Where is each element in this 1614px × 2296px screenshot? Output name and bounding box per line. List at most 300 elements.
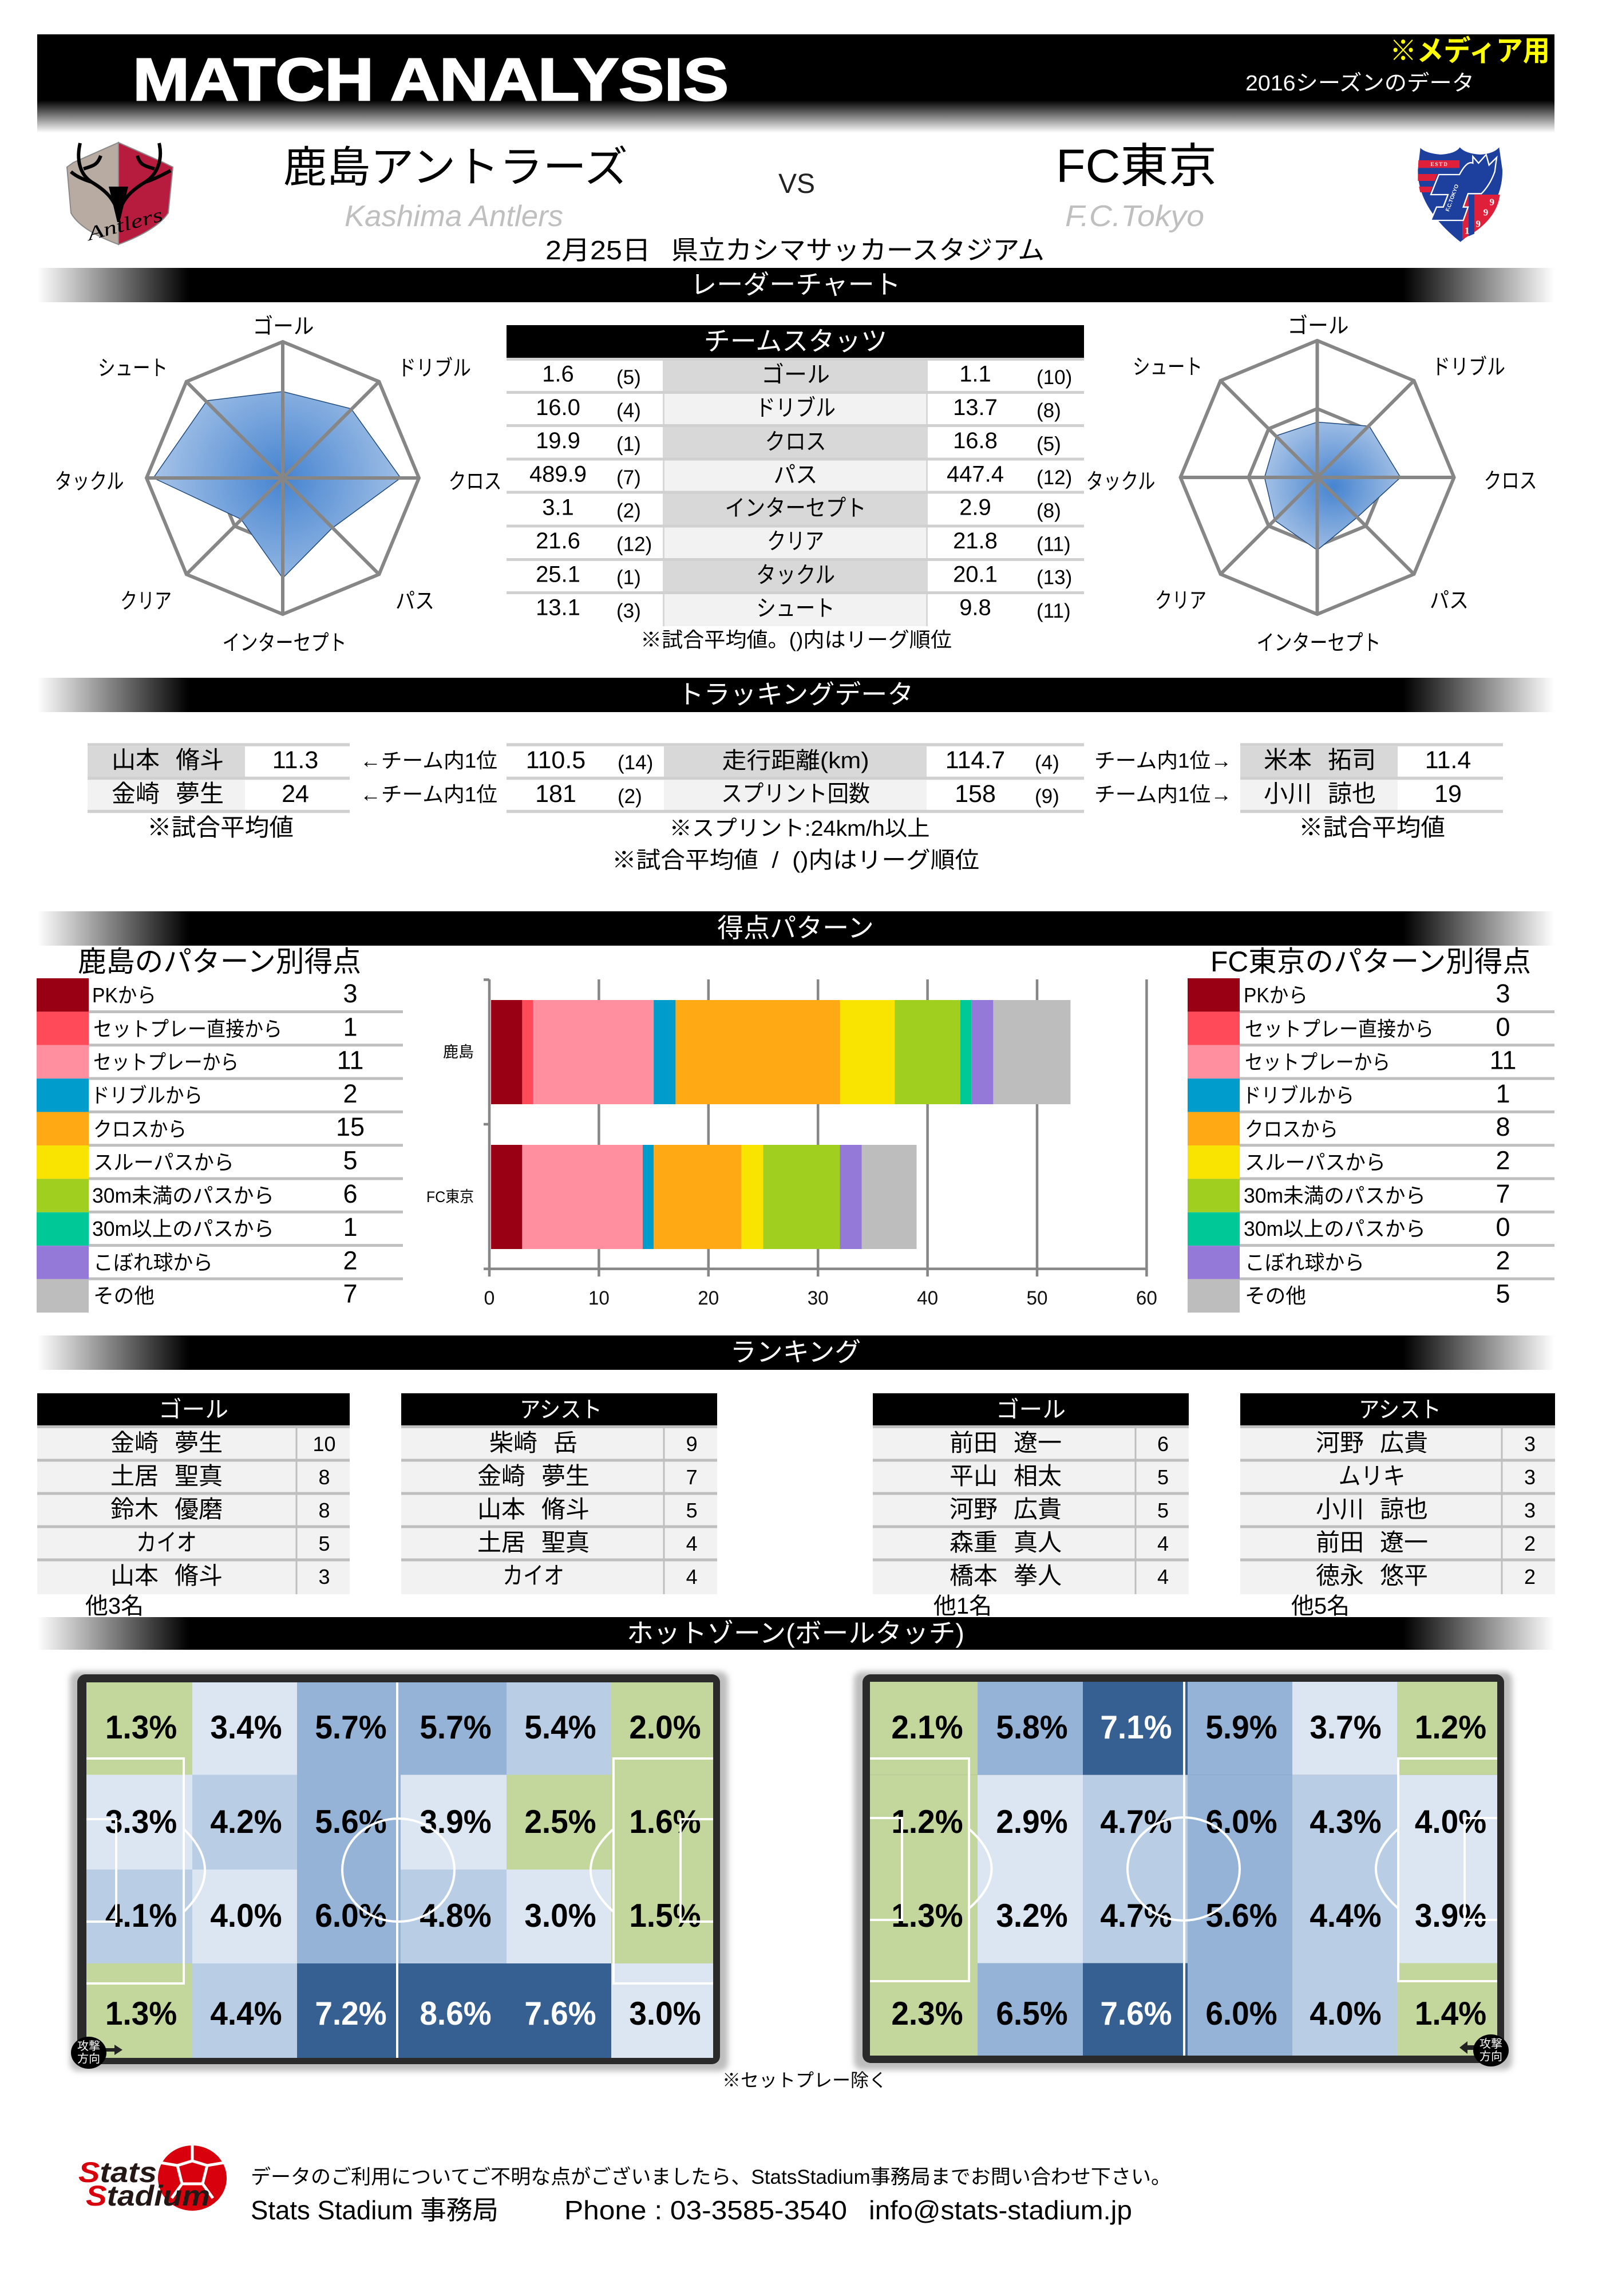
- icon: FC Tokyo crest: 9: [1475, 219, 1481, 230]
- icon: attack direction right: 攻撃: [77, 2040, 100, 2053]
- icon: FC Tokyo crest: F.C.TOKYO: [1445, 184, 1459, 212]
- pattern labels and counts: 11: [337, 1046, 363, 1075]
- panel: tracking team comparison: [507, 745, 1084, 873]
- axis labels: パス: [1430, 589, 1469, 613]
- axis labels: クリア: [120, 590, 172, 614]
- ranking table: Kashima goals: ゴール: [159, 1397, 228, 1422]
- section heading: tracking data: トラッキングデータ: [678, 679, 913, 709]
- axis labels: タックル: [1086, 470, 1155, 494]
- pattern labels and counts: 2: [343, 1246, 358, 1275]
- ranking table: Kashima assists: 5: [686, 1499, 698, 1522]
- axis labels: シュート: [1133, 355, 1202, 380]
- icon: Stats Stadium logo: [78, 2145, 227, 2212]
- ranking table: FC Tokyo goals: ゴール: [996, 1397, 1066, 1422]
- section heading: ranking: ランキング: [730, 1337, 861, 1367]
- axis labels: パス: [395, 590, 434, 614]
- ranking table: FC Tokyo goals: 4: [1157, 1565, 1169, 1588]
- pitch markings: [86, 1682, 713, 2058]
- pattern labels and counts: [1243, 979, 1516, 1309]
- pattern labels and counts: 1: [1496, 1079, 1510, 1108]
- ranking table: Kashima assists: 土居 聖真: [477, 1529, 590, 1556]
- stat values: Kashima: 1.6: [542, 362, 574, 387]
- panel: tracking team comparison: 114.7: [946, 746, 1005, 774]
- pattern labels and counts: 15: [336, 1112, 365, 1141]
- panel: tracking right leaders: 11.4: [1425, 746, 1471, 774]
- phone: Phone : 03-3585-3540: [564, 2195, 847, 2225]
- percentages: 1.5%: [629, 1897, 701, 1934]
- ranking notes: 他5名: [1291, 1594, 1350, 1619]
- stat values: FC Tokyo: (8): [1037, 500, 1061, 522]
- note: averages: ※試合平均値 / ()内はリーグ順位: [612, 848, 979, 873]
- ranking table: Kashima assists: [401, 1393, 717, 1594]
- icon: attack direction left: [1459, 2034, 1509, 2066]
- pattern labels and counts: 2: [1496, 1146, 1510, 1175]
- icon: Kashima Antlers crest: [67, 143, 173, 245]
- season note: 2016シーズンのデータ: [1245, 72, 1474, 96]
- match date and venue: 県立カシマサッカースタジアム: [671, 235, 1045, 265]
- percentages: 4.0%: [1310, 1995, 1382, 2032]
- section heading: hot zone: [37, 1617, 1554, 1650]
- stat values: FC Tokyo: (8): [1037, 400, 1061, 422]
- panel: tracking left leaders: 金崎 夢生: [112, 780, 224, 807]
- section heading: hot zone: ホットゾーン(ボールタッチ): [627, 1618, 964, 1648]
- footnote: ※試合平均値。()内はリーグ順位: [640, 628, 952, 651]
- pitch markings: [870, 1682, 1497, 2056]
- percentages: 1.3%: [105, 1709, 177, 1745]
- ranking table: FC Tokyo assists: ムリキ: [1338, 1463, 1406, 1489]
- versus: VS: [778, 169, 815, 199]
- percentages: 1.3%: [105, 1995, 177, 2032]
- axis labels: [55, 315, 501, 655]
- pattern labels and counts: 30m未満のパスから: [1244, 1184, 1426, 1207]
- axis labels: ゴール: [1288, 314, 1348, 338]
- stat names: シュート: [757, 596, 834, 621]
- stat values: FC Tokyo: 20.1: [953, 562, 998, 587]
- ranking table: Kashima goals: 8: [318, 1499, 330, 1522]
- stat names: インターセプト: [725, 496, 867, 521]
- ranking table: Kashima goals: 5: [318, 1532, 330, 1555]
- percentages: 4.1%: [105, 1897, 177, 1934]
- panel: tracking left leaders: 24: [282, 780, 309, 808]
- ranking table: FC Tokyo assists: 3: [1524, 1499, 1536, 1522]
- ranking notes: 他1名: [933, 1594, 992, 1619]
- percentages: 1.3%: [891, 1897, 963, 1934]
- stat values: Kashima: 19.9: [536, 428, 580, 453]
- ranking notes: 他3名: [85, 1594, 144, 1619]
- percentages: 2.5%: [524, 1803, 596, 1840]
- percentages: 2.9%: [996, 1803, 1068, 1840]
- ranking table: Kashima assists: 7: [686, 1465, 698, 1489]
- ranking table: Kashima goals: 鈴木 優磨: [110, 1496, 223, 1523]
- heat cells: [870, 1682, 1497, 2056]
- arrows: team best Kashima: [360, 749, 497, 806]
- ranking table: FC Tokyo goals: 森重 真人: [950, 1529, 1062, 1556]
- percentages: 5.6%: [315, 1803, 387, 1840]
- pattern labels and counts: セットプレー直接から: [93, 1017, 282, 1041]
- pattern labels and counts: PKから: [1244, 983, 1308, 1007]
- ranking table: Kashima goals: 山本 脩斗: [110, 1562, 223, 1589]
- panel: hot zone FC Tokyo: [854, 1671, 1512, 2070]
- section heading: scoring patterns: 得点パターン: [717, 913, 874, 943]
- icon: attack direction right: 方向: [77, 2052, 100, 2065]
- pattern labels and counts: 2: [343, 1079, 358, 1108]
- percentages: 3.9%: [1415, 1897, 1486, 1934]
- stat names: クロス: [765, 429, 826, 455]
- stat values: FC Tokyo: (11): [1037, 600, 1071, 622]
- percentages: 4.0%: [1415, 1803, 1486, 1840]
- pattern labels and counts: PKから: [92, 983, 156, 1007]
- media note: ※メディア用: [1390, 35, 1550, 67]
- ranking table: FC Tokyo goals: 橋本 拳人: [950, 1562, 1062, 1589]
- stat values: Kashima: 13.1: [536, 595, 580, 621]
- pattern labels and counts: 6: [343, 1179, 358, 1208]
- note: ※試合平均値: [1299, 814, 1445, 841]
- ranking table: Kashima goals: 金崎 夢生: [110, 1429, 223, 1456]
- stat names: ゴール: [761, 362, 830, 388]
- stat values: Kashima: 25.1: [536, 562, 580, 587]
- arrows: team best FC Tokyo: チーム内1位→: [1094, 783, 1232, 806]
- ranking table: Kashima assists: アシスト: [520, 1397, 602, 1422]
- category labels: 鹿島: [443, 1044, 474, 1061]
- ranking table: FC Tokyo goals: 5: [1157, 1499, 1169, 1522]
- data polygon: Kashima: [153, 392, 401, 578]
- ranking table: Kashima assists: 山本 脩斗: [477, 1496, 590, 1523]
- percentages: 2.3%: [891, 1995, 963, 2032]
- radar chart: Kashima: [55, 315, 501, 655]
- data polygon: FC Tokyo: [1264, 422, 1401, 550]
- pattern labels and counts: 0: [1496, 1212, 1510, 1242]
- section heading: radar chart: レーダーチャート: [690, 270, 901, 299]
- panel: Kashima goal patterns: [37, 946, 403, 1313]
- panel: FC Tokyo goal patterns: [1188, 946, 1554, 1313]
- percentages: [891, 1709, 1486, 2032]
- x axis labels: 50: [1027, 1287, 1047, 1309]
- percentages: 3.3%: [105, 1803, 177, 1840]
- percentages: 6.5%: [996, 1995, 1068, 2032]
- ranking table: FC Tokyo goals: 前田 遼一: [950, 1429, 1062, 1456]
- percentages: 1.2%: [1415, 1709, 1486, 1745]
- ranking notes: [85, 1594, 1350, 1619]
- match date and venue: 2月25日: [545, 235, 651, 265]
- stat values: FC Tokyo: (10): [1037, 366, 1072, 389]
- panel: tracking right leaders: 米本 拓司: [1264, 746, 1376, 773]
- panel: tracking right leaders: [1240, 745, 1503, 841]
- footnote: excludes set plays: ※セットプレー除く: [722, 2070, 887, 2090]
- stat names: パス: [774, 463, 817, 488]
- pattern labels and counts: 7: [1496, 1179, 1510, 1208]
- axis labels: クロス: [1484, 469, 1537, 493]
- pattern labels and counts: 1: [343, 1012, 358, 1041]
- panel: tracking left leaders: 山本 脩斗: [112, 746, 224, 773]
- pattern labels and counts: セットプレーから: [1245, 1050, 1390, 1074]
- percentages: 5.6%: [1205, 1897, 1277, 1934]
- pattern labels and counts: その他: [1245, 1284, 1306, 1307]
- stat values: Kashima: (7): [616, 467, 641, 489]
- panel: tracking right leaders: 19: [1434, 780, 1462, 808]
- x axis labels: 30: [808, 1287, 829, 1309]
- icon: FC Tokyo crest: ESTD: [1430, 162, 1449, 168]
- stat values: Kashima: 3.1: [542, 495, 574, 520]
- icon: Stats Stadium logo: Stats: [78, 2156, 157, 2188]
- pattern labels and counts: 0: [1496, 1012, 1510, 1041]
- percentages: 3.9%: [420, 1803, 492, 1840]
- panel: tracking team comparison: 110.5: [526, 746, 586, 774]
- panel: tracking left leaders: [88, 745, 350, 841]
- pattern labels and counts: その他: [93, 1284, 155, 1307]
- axis labels: シュート: [98, 357, 168, 381]
- ranking table: Kashima goals: 10: [312, 1432, 336, 1456]
- stat values: FC Tokyo: (11): [1037, 534, 1071, 555]
- ranking table: Kashima assists: 4: [686, 1532, 698, 1555]
- percentages: 7.1%: [1100, 1709, 1172, 1745]
- percentages: 5.7%: [420, 1709, 492, 1745]
- category labels: [426, 1044, 474, 1206]
- bar: Kashima: [491, 1000, 1070, 1104]
- pattern labels and counts: 30m以上のパスから: [92, 1217, 274, 1240]
- heat cells: [86, 1682, 713, 2058]
- stat values: Kashima: 16.0: [536, 395, 580, 420]
- percentages: 3.4%: [210, 1709, 282, 1745]
- x axis labels: 0: [484, 1287, 495, 1309]
- percentages: 5.8%: [996, 1709, 1068, 1745]
- icon: Stats Stadium logo: Stadium: [86, 2180, 210, 2212]
- x axis labels: 60: [1136, 1287, 1157, 1309]
- ranking table: Kashima assists: 4: [686, 1565, 698, 1588]
- panel: tracking team comparison: (14): [618, 752, 653, 774]
- pattern labels and counts: 5: [343, 1146, 358, 1175]
- percentages: 6.0%: [315, 1897, 387, 1934]
- stat values: FC Tokyo: 447.4: [947, 461, 1004, 487]
- note: sprint: ※スプリント:24km/h以上: [670, 817, 929, 841]
- stacked bar chart: scoring patterns: [426, 979, 1157, 1309]
- section heading: radar chart: [37, 268, 1554, 302]
- panel: team stats table: [507, 325, 1084, 651]
- ranking table: Kashima assists: 柴崎 岳: [489, 1429, 577, 1456]
- x axis labels: [484, 1287, 1157, 1309]
- axis labels: ドリブル: [398, 357, 471, 381]
- stat values: Kashima: (1): [616, 567, 641, 588]
- ranking table: FC Tokyo assists: 3: [1524, 1432, 1536, 1456]
- panel: tracking team comparison: (9): [1035, 785, 1059, 808]
- pattern labels and counts: クロスから: [93, 1117, 187, 1141]
- icon: FC Tokyo crest: [1418, 147, 1502, 242]
- panel: tracking team comparison: 181: [535, 780, 576, 808]
- note: ※試合平均値: [147, 814, 294, 841]
- percentages: 4.8%: [420, 1897, 492, 1934]
- percentages: 6.0%: [1205, 1995, 1277, 2032]
- stat values: FC Tokyo: (13): [1037, 567, 1072, 588]
- percentages: 3.7%: [1310, 1709, 1382, 1745]
- bar: FC Tokyo: [491, 1145, 917, 1249]
- axis labels: ゴール: [253, 315, 314, 339]
- ranking table: FC Tokyo assists: 徳永 悠平: [1316, 1562, 1428, 1589]
- colour swatches: [1188, 978, 1240, 1313]
- percentages: [105, 1709, 701, 2032]
- heading: team stats: チームスタッツ: [704, 326, 887, 356]
- stat names: ドリブル: [755, 396, 836, 421]
- percentages: 1.2%: [891, 1803, 963, 1840]
- percentages: 5.7%: [315, 1709, 387, 1745]
- ranking table: FC Tokyo assists: 2: [1524, 1565, 1536, 1588]
- percentages: 3.0%: [524, 1897, 596, 1934]
- ranking table: Kashima assists: 9: [686, 1432, 698, 1456]
- panel: tracking team comparison: (2): [618, 785, 642, 808]
- axis labels: クリア: [1155, 589, 1206, 613]
- axis labels: タックル: [55, 470, 124, 494]
- stat values: Kashima: (1): [616, 433, 641, 456]
- team name: FC Tokyo: FC東京: [1056, 140, 1217, 192]
- ranking table: FC Tokyo goals: 6: [1157, 1432, 1169, 1456]
- arrows: team best Kashima: ←チーム内1位: [360, 749, 497, 772]
- ranking table: Kashima goals: 8: [318, 1465, 330, 1489]
- percentages: 4.4%: [1310, 1897, 1382, 1934]
- icon: attack direction left: 方向: [1480, 2050, 1502, 2063]
- heading: 鹿島のパターン別得点: [78, 946, 361, 978]
- stat values: FC Tokyo: 9.8: [959, 595, 991, 621]
- panel: tracking left leaders: 11.3: [272, 746, 318, 774]
- ranking table: FC Tokyo goals: 4: [1157, 1532, 1169, 1555]
- panel: tracking team comparison: 158: [955, 780, 996, 808]
- percentages: 4.4%: [210, 1995, 282, 2032]
- stat values: Kashima: [529, 362, 652, 622]
- percentages: 4.3%: [1310, 1803, 1382, 1840]
- stat values: Kashima: 21.6: [536, 528, 580, 554]
- axis labels: インターセプト: [222, 631, 347, 655]
- section heading: tracking data: [37, 678, 1554, 712]
- radar chart: FC Tokyo: [1086, 314, 1537, 655]
- pattern labels and counts: セットプレーから: [93, 1050, 239, 1074]
- ranking table: FC Tokyo assists: アシスト: [1359, 1397, 1441, 1422]
- arrows: team best FC Tokyo: チーム内1位→: [1094, 749, 1232, 772]
- panel: tracking team comparison: 走行距離(km): [722, 748, 869, 773]
- stat values: FC Tokyo: 1.1: [959, 362, 991, 387]
- pattern labels and counts: 3: [1496, 979, 1510, 1008]
- stat names: クリア: [767, 529, 824, 554]
- axis labels: インターセプト: [1257, 631, 1380, 655]
- pattern labels and counts: 1: [343, 1212, 358, 1242]
- stat values: Kashima: (2): [616, 500, 641, 522]
- stat values: FC Tokyo: 16.8: [953, 428, 998, 453]
- axis labels: ドリブル: [1432, 355, 1505, 380]
- panel: tracking team comparison: スプリント回数: [721, 781, 870, 807]
- ranking table: FC Tokyo assists: 3: [1524, 1465, 1536, 1489]
- contact note: データのご利用についてご不明な点がございましたら、StatsStadium事務局までお問い合わせ下さい。: [251, 2166, 1171, 2188]
- ranking table: Kashima assists: カイオ: [503, 1562, 564, 1589]
- ranking table: FC Tokyo assists: 2: [1524, 1532, 1536, 1555]
- stat values: FC Tokyo: 2.9: [959, 495, 991, 520]
- arrows: team best FC Tokyo: [1094, 749, 1232, 806]
- arrows: team best Kashima: ←チーム内1位: [360, 783, 497, 806]
- stat values: FC Tokyo: (12): [1037, 467, 1072, 489]
- pattern labels and counts: 5: [1496, 1279, 1510, 1309]
- percentages: 4.7%: [1100, 1803, 1172, 1840]
- office name: Stats Stadium 事務局: [251, 2195, 499, 2225]
- percentages: 3.0%: [629, 1995, 701, 2032]
- pattern labels and counts: こぼれ球から: [1245, 1251, 1364, 1274]
- pattern labels and counts: [91, 979, 365, 1309]
- stat names: [725, 362, 867, 621]
- pattern labels and counts: 30m未満のパスから: [92, 1184, 274, 1207]
- ranking table: Kashima goals: [37, 1393, 350, 1594]
- x axis labels: 20: [698, 1287, 719, 1309]
- title: MATCH ANALYSIS: [133, 46, 729, 113]
- section heading: scoring patterns: [37, 911, 1554, 946]
- ranking table: FC Tokyo assists: 河野 広貴: [1316, 1429, 1428, 1456]
- x axis labels: 40: [917, 1287, 938, 1309]
- ranking table: Kashima goals: 3: [318, 1565, 330, 1588]
- panel: tracking team comparison: (4): [1035, 752, 1059, 774]
- axis labels: クロス: [449, 470, 501, 494]
- icon: attack direction left: 攻撃: [1480, 2037, 1502, 2050]
- ranking table: FC Tokyo assists: [1240, 1393, 1555, 1594]
- panel: hot zone Kashima: [70, 1671, 728, 2071]
- x axis labels: 10: [588, 1287, 610, 1309]
- heading: FC東京のパターン別得点: [1210, 946, 1531, 978]
- percentages: 4.2%: [210, 1803, 282, 1840]
- percentages: 8.6%: [420, 1995, 492, 2032]
- pattern labels and counts: クロスから: [1245, 1117, 1338, 1141]
- percentages: 2.0%: [629, 1709, 701, 1745]
- ranking table: FC Tokyo assists: 小川 諒也: [1316, 1496, 1428, 1523]
- stat values: FC Tokyo: 13.7: [953, 395, 998, 420]
- ranking table: FC Tokyo goals: 5: [1157, 1465, 1169, 1489]
- header banner: [37, 34, 1554, 133]
- stat values: Kashima: (5): [616, 366, 641, 389]
- percentages: 4.7%: [1100, 1897, 1172, 1934]
- pattern labels and counts: 8: [1496, 1112, 1510, 1141]
- colour swatches: [37, 978, 89, 1313]
- ranking table: FC Tokyo goals: [873, 1393, 1189, 1594]
- pattern labels and counts: 11: [1490, 1046, 1516, 1075]
- stat values: FC Tokyo: (5): [1037, 433, 1061, 456]
- icon: FC Tokyo crest: 9: [1489, 196, 1494, 207]
- team name latin: Kashima: Kashima Antlers: [345, 200, 563, 233]
- percentages: 7.6%: [524, 1995, 596, 2032]
- category labels: FC東京: [426, 1188, 474, 1206]
- ranking table: FC Tokyo goals: 河野 広貴: [950, 1496, 1062, 1523]
- ranking table: FC Tokyo goals: 平山 相太: [950, 1463, 1062, 1489]
- stat values: Kashima: 489.9: [529, 461, 587, 487]
- percentages: 2.1%: [891, 1709, 963, 1745]
- stat values: Kashima: (3): [616, 600, 641, 622]
- email: info@stats-stadium.jp: [869, 2195, 1132, 2225]
- percentages: 1.4%: [1415, 1995, 1486, 2032]
- percentages: 5.4%: [524, 1709, 596, 1745]
- percentages: 5.9%: [1205, 1709, 1277, 1745]
- ranking table: Kashima goals: カイオ: [136, 1529, 197, 1556]
- pattern labels and counts: 30m以上のパスから: [1244, 1217, 1426, 1240]
- section heading: ranking: [37, 1335, 1554, 1370]
- percentages: 7.2%: [315, 1995, 387, 2032]
- ranking table: FC Tokyo assists: 前田 遼一: [1316, 1529, 1428, 1556]
- pattern labels and counts: スルーパスから: [93, 1151, 234, 1174]
- stat values: FC Tokyo: 21.8: [953, 528, 998, 554]
- percentages: 6.0%: [1205, 1803, 1277, 1840]
- percentages: 1.6%: [629, 1803, 701, 1840]
- ranking table: Kashima assists: 金崎 夢生: [477, 1463, 590, 1489]
- pattern labels and counts: 3: [343, 979, 358, 1008]
- stat values: FC Tokyo: [947, 362, 1072, 622]
- percentages: 4.0%: [210, 1897, 282, 1934]
- icon: FC Tokyo crest: 9: [1484, 207, 1489, 218]
- panel: tracking right leaders: 小川 諒也: [1264, 780, 1376, 807]
- pattern labels and counts: 7: [343, 1279, 358, 1309]
- ranking table: Kashima goals: 土居 聖真: [110, 1463, 223, 1489]
- stat values: Kashima: (12): [616, 534, 652, 555]
- icon: FC Tokyo crest: 1: [1465, 225, 1470, 236]
- pattern labels and counts: セットプレー直接から: [1245, 1017, 1434, 1041]
- pattern labels and counts: こぼれ球から: [93, 1251, 213, 1274]
